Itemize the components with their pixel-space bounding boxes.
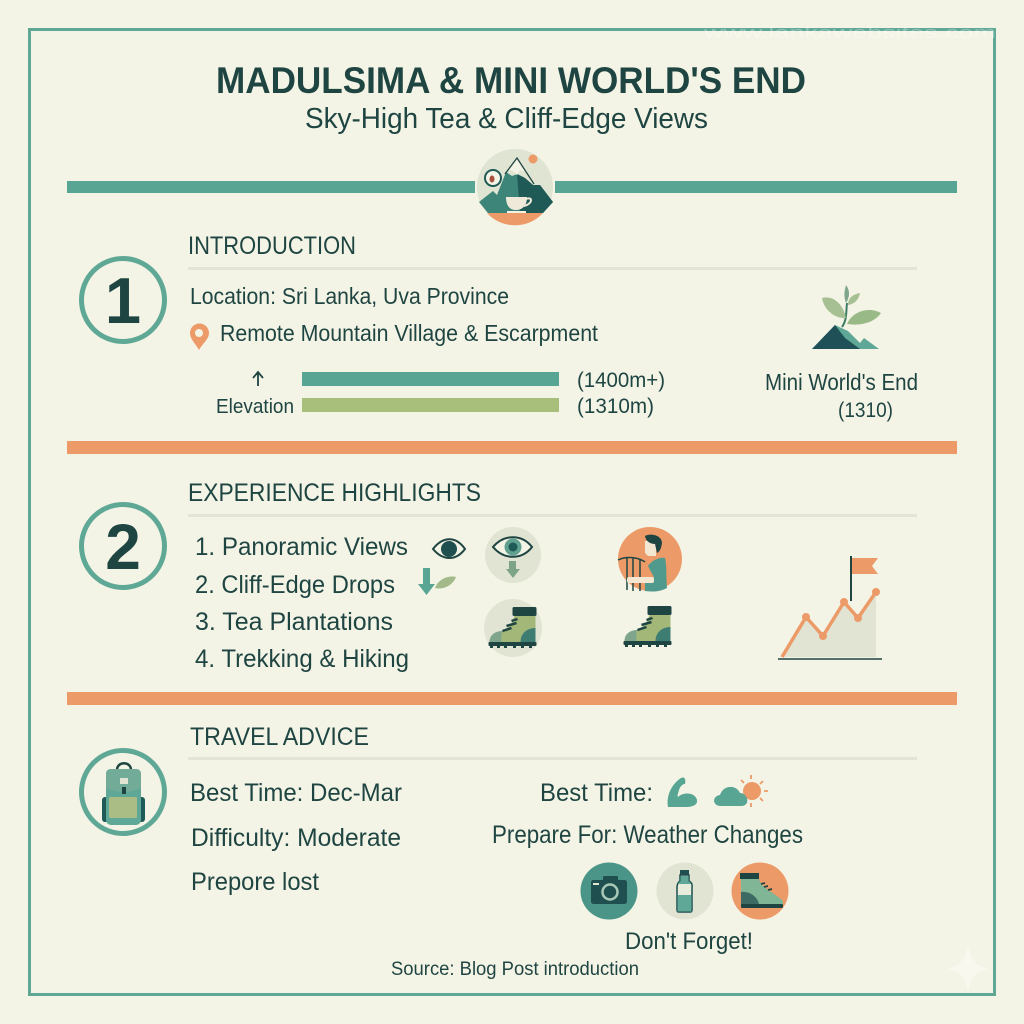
icon: tea sprout on mountain bbox=[812, 285, 881, 349]
advice list left: Prepore lost bbox=[191, 868, 319, 896]
icon: boot bbox=[624, 606, 672, 647]
highlights list bbox=[195, 533, 409, 673]
value: 1310m: (1310m) bbox=[577, 395, 654, 418]
elevation chart bbox=[216, 369, 665, 418]
icon: water bottle bbox=[656, 862, 714, 920]
section 3: backpack badge bbox=[82, 750, 164, 834]
best time label: Best Time: bbox=[540, 779, 653, 807]
bar: 1310m bbox=[302, 398, 559, 412]
icon: arrow down and leaf bbox=[418, 568, 456, 595]
advice list left: Difficulty: Moderate bbox=[191, 824, 401, 852]
section 3: heading: TRAVEL ADVICE bbox=[190, 723, 369, 751]
icon: person at railing bbox=[618, 527, 682, 592]
title: MADULSIMA & MINI WORLD'S END bbox=[216, 60, 806, 101]
icon: eye bbox=[433, 539, 465, 558]
section 2: number badge: 2 bbox=[105, 511, 141, 583]
label: Mini World's End: Mini World's End bbox=[765, 369, 918, 395]
top banner bar bbox=[67, 181, 957, 193]
chart: ascent with flag bbox=[778, 556, 882, 659]
bar: 1400m bbox=[302, 372, 559, 386]
icon: flexed arm bbox=[668, 777, 697, 807]
subtitle: Sky-High Tea & Cliff-Edge Views bbox=[305, 103, 708, 135]
highlights list: 2. Cliff-Edge Drops bbox=[195, 571, 395, 599]
arrow: up bbox=[253, 372, 263, 386]
watermark sparkle bbox=[948, 946, 988, 992]
highlights list: 4. Trekking & Hiking bbox=[195, 645, 409, 673]
section 2: heading: EXPERIENCE HIGHLIGHTS bbox=[188, 479, 481, 507]
icon: cloud and sun bbox=[714, 775, 768, 807]
value: 1400m: (1400m+) bbox=[577, 369, 665, 392]
icon: mountain and tea cup bbox=[477, 149, 553, 225]
location description: Remote Mountain Village & Escarpment bbox=[220, 320, 599, 346]
elevation label: Elevation bbox=[216, 396, 294, 418]
icon: camera bbox=[580, 862, 638, 920]
icon: map pin bbox=[190, 324, 209, 350]
section 1: number badge bbox=[82, 258, 164, 342]
divider: orange 1 bbox=[67, 441, 957, 454]
location text: Location: Sri Lanka, Uva Province bbox=[190, 283, 509, 309]
divider: orange 2 bbox=[67, 692, 957, 705]
section 1: heading: INTRODUCTION bbox=[188, 232, 356, 260]
prepare for text: Prepare For: Weather Changes bbox=[492, 821, 803, 849]
don't forget label: Don't Forget! bbox=[625, 928, 753, 955]
icon: eye and arrow in circle bbox=[485, 527, 541, 583]
section 2: number badge bbox=[82, 504, 164, 588]
source line: Source: Blog Post introduction bbox=[391, 958, 639, 980]
icon: boot on orange circle bbox=[732, 862, 788, 920]
watermark text: www.lankawebsites.com bbox=[702, 23, 996, 42]
highlights list: 1. Panoramic Views bbox=[195, 533, 408, 561]
advice list left bbox=[190, 779, 402, 896]
icon: boot in circle bbox=[484, 599, 542, 657]
label: 1310: (1310) bbox=[838, 399, 893, 422]
advice list left: Best Time: Dec-Mar bbox=[190, 779, 402, 807]
section 1: number badge: 1 bbox=[105, 264, 141, 337]
highlights list: 3. Tea Plantations bbox=[195, 608, 393, 636]
